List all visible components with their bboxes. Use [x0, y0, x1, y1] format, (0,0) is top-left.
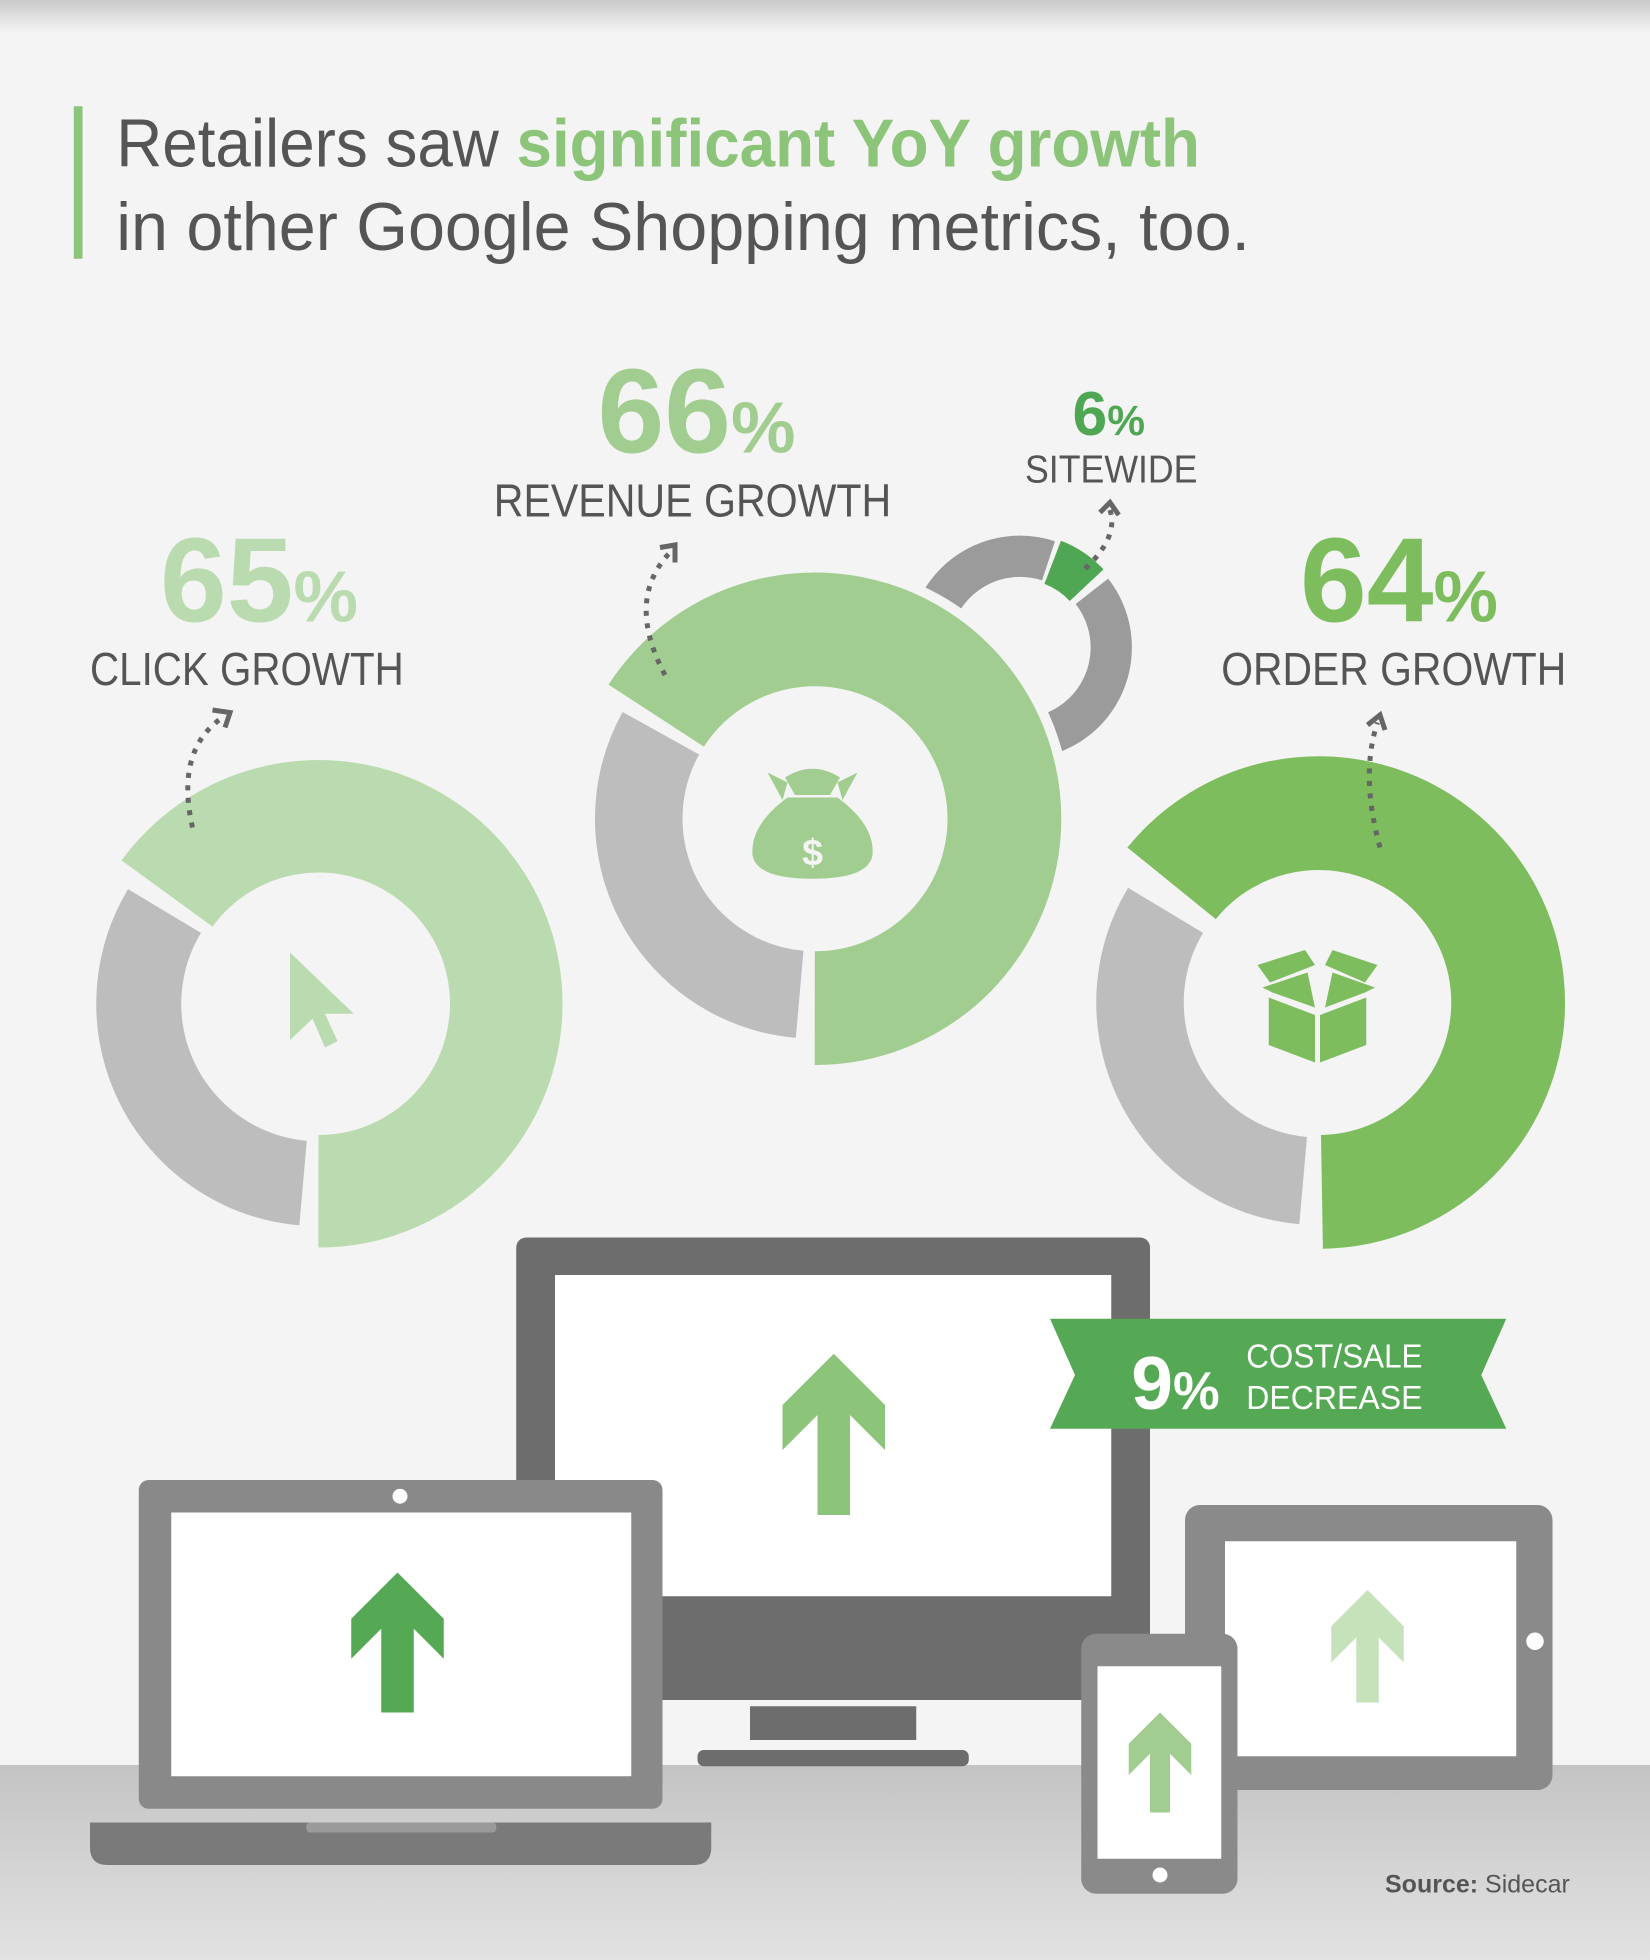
banner: cost/sale: COST/SALE — [1246, 1338, 1422, 1375]
title: Retailers saw significant YoY growth — [116, 106, 1200, 181]
label: 66% revenue growth: REVENUE GROWTH — [494, 474, 891, 526]
arrow: phone — [1129, 1712, 1191, 1812]
banner: cost/sale — [1050, 1319, 1506, 1429]
donut: revenue growth — [553, 557, 1077, 1081]
label: 6% sitewide — [1025, 379, 1198, 492]
banner: cost/sale: DECREASE — [1246, 1379, 1422, 1417]
device: tablet — [1185, 1505, 1552, 1790]
icon: money bag: $ — [802, 831, 823, 873]
label: 64% order growth — [1221, 513, 1566, 695]
label: 65% click growth: 65% — [160, 513, 358, 647]
arrow: dotted revenue — [646, 545, 675, 675]
arrow: laptop — [351, 1572, 444, 1712]
label: 66% revenue growth: 66% — [598, 345, 795, 479]
arrow: dotted order — [1368, 715, 1385, 848]
source: Source: Sidecar — [1385, 1871, 1570, 1899]
label: 64% order growth: 64% — [1300, 513, 1498, 647]
icon: box — [1258, 950, 1378, 1062]
icon: money bag — [752, 769, 873, 879]
device: phone — [1081, 1634, 1238, 1894]
icon: cursor — [290, 952, 354, 1048]
donut: click growth — [57, 742, 581, 1266]
banner: cost/sale: 9% — [1131, 1341, 1220, 1425]
small donut: sitewide — [892, 519, 1148, 776]
device: laptop — [90, 1480, 711, 1865]
title: in other Google Shopping metrics, too. — [116, 190, 1250, 265]
label: 65% click growth: CLICK GROWTH — [90, 643, 404, 695]
device: monitor — [516, 1238, 1150, 1766]
arrow: dotted sitewide — [1085, 502, 1119, 569]
donut: order growth — [1052, 736, 1585, 1269]
label: 65% click growth — [90, 513, 404, 695]
title — [74, 106, 1250, 265]
label: 64% order growth: ORDER GROWTH — [1221, 643, 1566, 695]
label: 6% sitewide: SITEWIDE — [1025, 449, 1198, 492]
arrow: dotted click — [188, 710, 230, 828]
arrow: monitor — [782, 1354, 885, 1515]
label: 66% revenue growth — [494, 344, 891, 526]
label: 6% sitewide: 6% — [1072, 379, 1145, 449]
arrow: tablet — [1331, 1590, 1404, 1702]
